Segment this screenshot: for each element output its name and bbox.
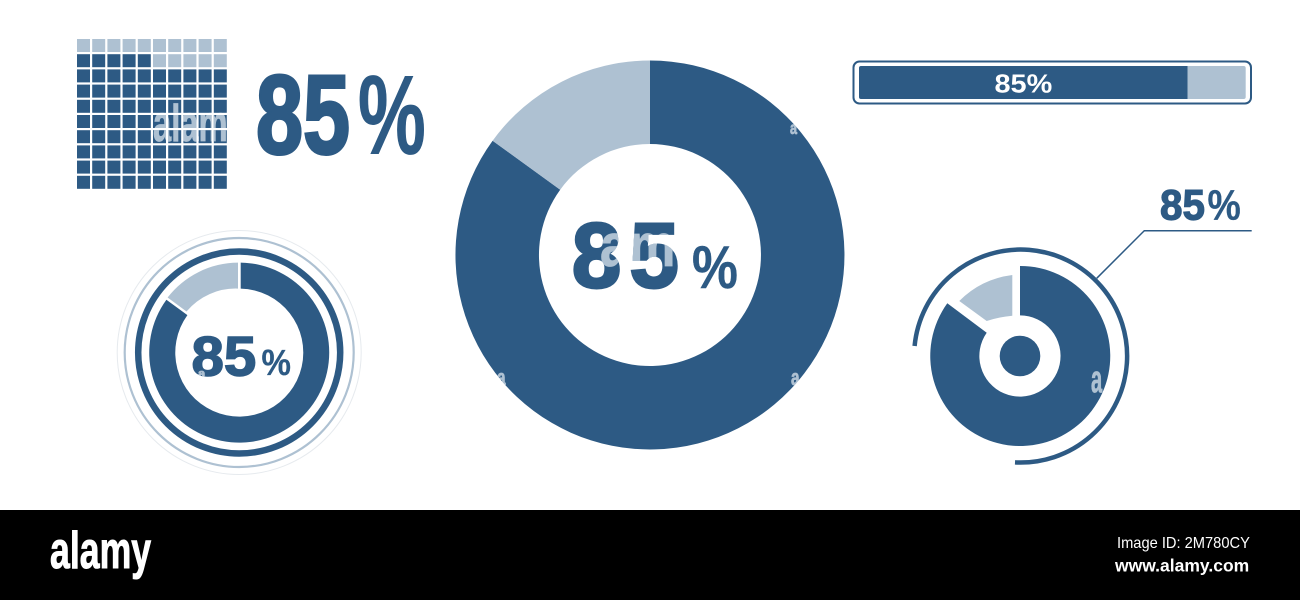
gauge label: 85%: 85	[1160, 180, 1205, 229]
panel: gauge chart	[915, 180, 1252, 463]
watermark fragments: a	[497, 366, 506, 391]
central donut label: 85%	[572, 204, 738, 307]
footer logo: alamy: alamy	[50, 523, 151, 580]
gauge label: 85%	[1160, 180, 1241, 229]
panel: progress bar	[854, 62, 1251, 104]
waffle chart heading: 85%: 85	[256, 53, 350, 178]
footer bar	[0, 510, 1300, 600]
ringed donut label: 85%	[192, 326, 291, 388]
gauge label: 85%: %	[1208, 181, 1241, 229]
watermark fragments: alam	[153, 96, 228, 153]
panel: central donut chart	[455, 60, 844, 450]
central donut label: 85%: 85	[572, 204, 679, 307]
watermark fragments	[153, 96, 1103, 401]
panel: waffle chart	[77, 39, 227, 189]
watermark fragments: a	[1091, 358, 1103, 401]
panel: ringed donut chart	[117, 230, 361, 474]
waffle chart heading: 85%	[256, 53, 426, 178]
watermark fragments: a	[790, 119, 797, 139]
watermark fragments: a	[791, 366, 800, 391]
footer website: www.alamy.com	[1114, 556, 1249, 576]
watermark fragments: am	[600, 212, 675, 279]
watermark fragments: a	[198, 366, 206, 381]
progress bar label: 85%: 85%	[994, 69, 1052, 98]
central donut label: 85%: %	[692, 233, 738, 301]
ringed donut label: 85%: %	[262, 344, 291, 383]
ringed donut label: 85%: 85	[192, 326, 256, 388]
footer image id: Image ID: 2M780CY	[1117, 534, 1250, 552]
waffle chart heading: 85%: %	[358, 53, 426, 178]
